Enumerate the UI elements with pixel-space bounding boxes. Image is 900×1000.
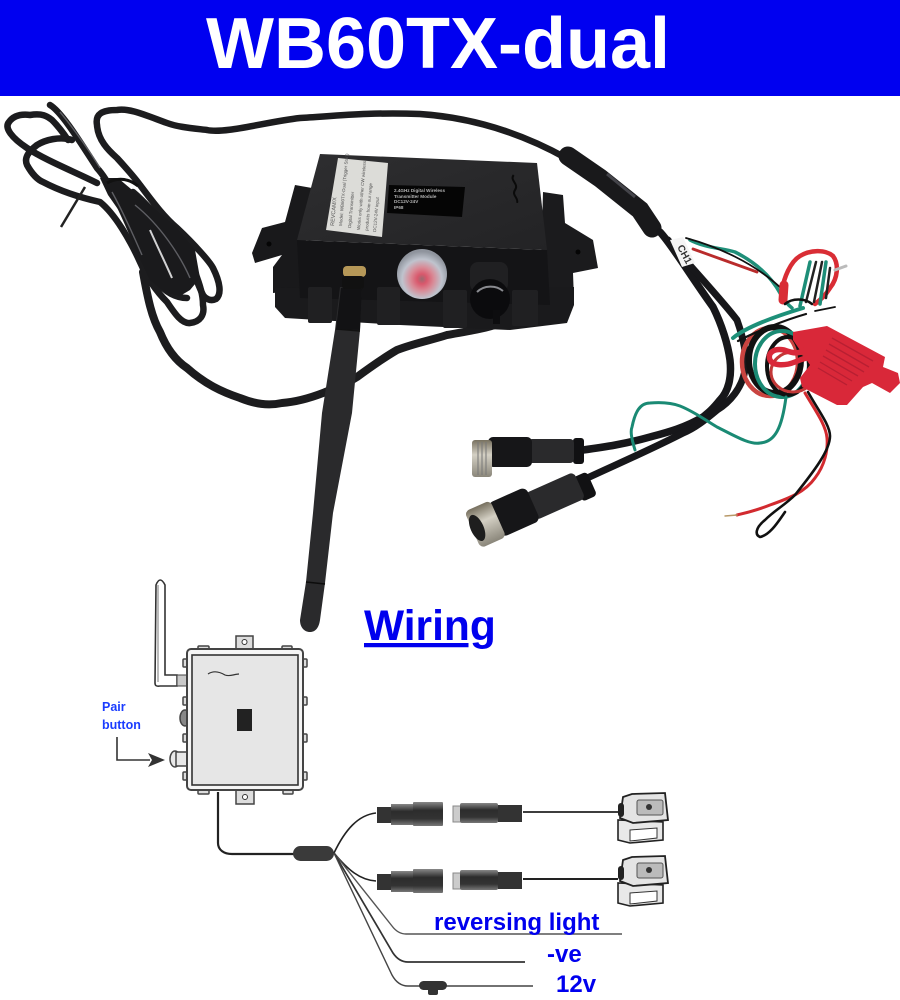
spec label text: DC12V-24V input: [372, 196, 380, 232]
fuse holder hook: [769, 346, 810, 365]
module base flange: [275, 287, 574, 330]
diagram: transmitter box: [155, 580, 307, 804]
photo: moulded cable junction: [568, 156, 652, 228]
diagram: main cable and splitter: [218, 792, 376, 881]
photo: zip tie: [61, 187, 85, 227]
product label text: IP68: [394, 205, 404, 210]
fuse holder ribs: [818, 338, 873, 385]
diagram: 12v wire with fuse: [334, 853, 533, 995]
green strand across coil: [733, 308, 803, 338]
product label text: DC12V-24V: [394, 199, 419, 204]
lower cable run: [143, 272, 500, 404]
photo: coloured wires: [631, 238, 846, 537]
loose green wire: [631, 397, 786, 450]
photo: cable tie band: [107, 179, 138, 186]
diagram box panel: [192, 655, 298, 785]
module base tabs: [308, 287, 538, 328]
module right ear: [540, 192, 598, 300]
diagram antenna: [155, 580, 177, 686]
label: 12v: 12v: [556, 971, 597, 998]
loop strand two: [8, 114, 97, 183]
product label text: [394, 188, 445, 210]
photo: CH1 cable label: CH1: [674, 243, 694, 266]
title: WB60TX-dual: [206, 4, 670, 84]
upper cable run: [97, 110, 566, 300]
gland nut: [470, 262, 510, 324]
photo: upper aviation connector: [472, 437, 584, 477]
label: negative: -ve: [547, 941, 582, 968]
wire green run from sleeve: [690, 240, 792, 308]
photo: transmitter module: [252, 153, 598, 330]
diagram: negative wire: [334, 853, 525, 962]
module top face: [297, 154, 547, 250]
title banner: [0, 0, 900, 96]
loose black wire: [757, 392, 830, 537]
diagram wave mark: [208, 672, 239, 676]
product label text: Transmitter Module: [394, 194, 437, 199]
diagram: top connector pair: [377, 802, 618, 826]
photo: red fuse holder: [769, 326, 900, 405]
photo: cable highlights: [60, 112, 190, 278]
white spec label: [326, 158, 388, 237]
spec label text: Works only with other CW wireless: [356, 160, 367, 230]
loop strand one: [50, 105, 187, 298]
spec label text: [330, 153, 380, 232]
wave mark: [512, 175, 518, 203]
icon: top camera: [618, 793, 668, 843]
pairing vent: [397, 249, 447, 299]
icon: bottom camera: [618, 856, 668, 906]
heading: Wiring: Wiring: [364, 603, 496, 650]
black product label: [387, 185, 465, 217]
label: reversing light: reversing light: [434, 909, 599, 936]
photo: lower aviation connector: [463, 460, 598, 549]
pair button callout: [102, 700, 165, 767]
photo: dense cable bundle: [100, 178, 200, 296]
spec label text: REVCAM/X: [330, 197, 339, 226]
diagram side bumps: [170, 636, 307, 804]
pair button text: button: [102, 718, 141, 732]
spec label text: Model: WB60TX-Dual (Trigger Start): [338, 153, 349, 226]
photo: coiled power cable: [8, 105, 566, 404]
wire top loop: [782, 251, 837, 304]
diagram box outer: [187, 649, 303, 790]
pair button arrow: [117, 737, 150, 760]
module left ear: [252, 185, 312, 293]
diagram: bottom connector pair: [377, 869, 618, 893]
product label text: 2.4GHz Digital Wireless: [394, 188, 445, 193]
photo: CH1 cable label: [670, 237, 695, 267]
pair button text: Pair: [102, 700, 126, 714]
photo: antenna: [300, 266, 366, 632]
spec label text: products from our range: [364, 182, 373, 231]
loop strand three: [26, 138, 203, 323]
diagram: reversing light wire: [334, 853, 622, 934]
module front face: [297, 240, 550, 305]
loose red wire: [737, 393, 827, 515]
diagram antenna socket: [177, 675, 188, 686]
photo: camera cables: [583, 232, 746, 480]
spec label text: Digital Transmitter: [347, 191, 355, 228]
diagram label: [237, 709, 252, 731]
wire red run from sleeve: [693, 249, 757, 272]
coil: [742, 328, 798, 396]
